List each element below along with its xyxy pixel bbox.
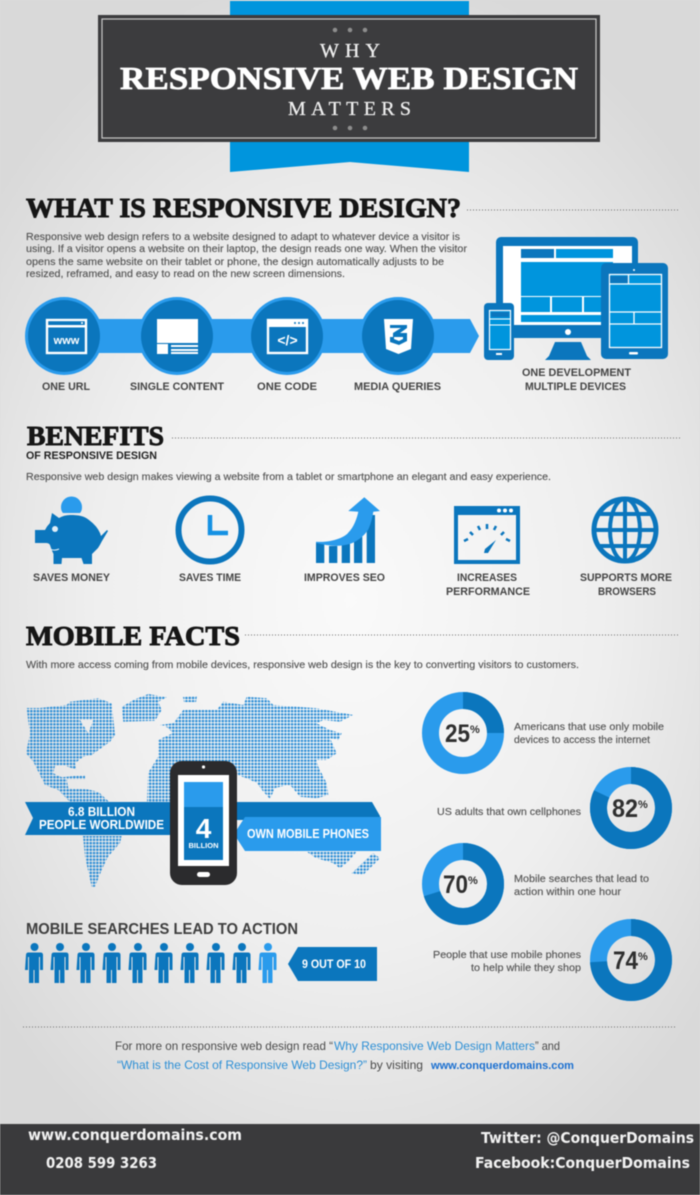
subheading: mobile searches: MOBILE SEARCHES LEAD TO ACTION bbox=[26, 921, 298, 938]
mobile facts intro: With more access coming from mobile devices, responsive web design is the key to converting visitors to customers. bbox=[26, 659, 579, 671]
right ribbon: own mobile phones: OWN MOBILE PHONES bbox=[247, 827, 369, 841]
title plate bbox=[98, 15, 600, 142]
closing call to action: by visiting bbox=[370, 1058, 423, 1072]
title line 3: MATTERS bbox=[288, 98, 411, 120]
icon: clock bbox=[178, 498, 242, 562]
text: 25 percent: devices to access the internet bbox=[514, 734, 650, 746]
devices label bbox=[522, 367, 631, 393]
donut: 74 percent bbox=[598, 928, 664, 992]
left ribbon: population: PEOPLE WORLDWIDE bbox=[39, 818, 164, 832]
text: 82 percent: US adults that own cellphones bbox=[437, 806, 581, 818]
phone graphic: BILLION bbox=[188, 841, 218, 850]
donut: 25 percent: % bbox=[470, 724, 480, 736]
blue ribbon bbox=[230, 1, 469, 172]
footer phone: 0208 599 3263 bbox=[46, 1154, 157, 1172]
closing call to action: “What is the Cost of Responsive Web Design?” bbox=[117, 1058, 367, 1072]
donut: 82 percent: 82 bbox=[612, 795, 638, 823]
text: 25 percent: Americans that use only mobile bbox=[514, 721, 664, 733]
text: 70 percent: action within one hour bbox=[514, 886, 622, 898]
icon: one url: www bbox=[53, 335, 80, 347]
donut: 70 percent: 70 bbox=[443, 871, 468, 899]
feature labels: MEDIA QUERIES bbox=[354, 381, 441, 393]
heading: mobile facts: MOBILE FACTS bbox=[26, 621, 240, 651]
benefit labels: INCREASES bbox=[457, 572, 517, 584]
tag: 9 out of 10: 9 OUT OF 10 bbox=[302, 959, 366, 971]
closing call to action: www.conquerdomains.com bbox=[430, 1060, 574, 1072]
closing call to action bbox=[115, 1039, 574, 1072]
tablet bbox=[601, 263, 668, 359]
feature labels: SINGLE CONTENT bbox=[130, 381, 224, 393]
footer website: www.conquerdomains.com bbox=[28, 1126, 242, 1144]
icon: media queries css3 shield bbox=[359, 297, 437, 375]
intro paragraph: Responsive web design refers to a website designed to adapt to whatever device a visitor is bbox=[26, 231, 460, 243]
devices label: MULTIPLE DEVICES bbox=[525, 381, 626, 393]
bottom ornament dots bbox=[333, 126, 367, 130]
text: 74 percent bbox=[433, 949, 581, 974]
top ornament dots bbox=[333, 28, 367, 32]
closing call to action: Why Responsive Web Design Matters bbox=[334, 1039, 535, 1053]
donut: 82 percent: % bbox=[638, 799, 648, 811]
phone graphic: 4 bbox=[196, 813, 212, 844]
icon: globe bbox=[594, 499, 656, 561]
footer bar bbox=[0, 1124, 700, 1195]
intro paragraph bbox=[26, 231, 468, 280]
heading: what is responsive design: WHAT IS RESPONSIVE DESIGN? bbox=[26, 193, 461, 223]
title line 2: RESPONSIVE WEB DESIGN bbox=[120, 60, 578, 96]
benefit labels: SAVES TIME bbox=[179, 572, 241, 584]
text: 74 percent: People that use mobile phones bbox=[433, 949, 581, 961]
icon: multiple devices bbox=[484, 237, 668, 360]
desktop monitor bbox=[496, 237, 638, 360]
intro paragraph: using. If a visitor opens a website on their laptop, the design reads one way. When the visitor bbox=[26, 243, 468, 255]
benefit labels: SUPPORTS MORE bbox=[580, 572, 672, 584]
dotted world map bbox=[26, 694, 380, 887]
donut: 74 percent: % bbox=[638, 951, 648, 963]
phone bbox=[484, 303, 514, 360]
donut: 70 percent bbox=[430, 852, 496, 916]
text: 74 percent: to help while they shop bbox=[471, 962, 581, 974]
left ribbon: population: 6.8 BILLION bbox=[68, 805, 135, 819]
phone graphic bbox=[170, 761, 237, 885]
benefit labels: PERFORMANCE bbox=[446, 586, 530, 598]
closing call to action: For more on responsive web design read “ bbox=[115, 1039, 333, 1053]
feature labels: ONE CODE bbox=[257, 381, 317, 393]
closing call to action: ” and bbox=[535, 1039, 560, 1053]
icon: one url bbox=[25, 297, 103, 375]
header banner bbox=[98, 1, 600, 172]
donut: 25 percent bbox=[430, 700, 496, 766]
benefit labels: SAVES MONEY bbox=[33, 572, 111, 584]
pictogram: 9 out of 10 people bbox=[25, 943, 276, 983]
donut: 82 percent bbox=[598, 776, 664, 840]
donut: 74 percent: 74 bbox=[613, 947, 638, 975]
text: 70 percent: Mobile searches that lead to bbox=[514, 873, 649, 885]
icon: piggy bank bbox=[35, 497, 108, 564]
text: 70 percent bbox=[514, 873, 649, 898]
benefit labels: BROWSERS bbox=[598, 586, 656, 598]
devices label: ONE DEVELOPMENT bbox=[522, 367, 631, 379]
icon: performance gauge window bbox=[454, 506, 520, 562]
feature band bbox=[25, 297, 479, 375]
icon: single content bbox=[138, 297, 216, 375]
intro paragraph: resized, reframed, and easy to read on the new screen dimensions. bbox=[26, 268, 345, 280]
intro paragraph: opens the same website on their tablet or phone, the design automatically adjusts to be bbox=[26, 256, 444, 268]
donut: 25 percent: 25 bbox=[445, 720, 470, 748]
arrow band bbox=[40, 319, 479, 353]
right ribbon: own mobile phones bbox=[234, 802, 381, 851]
left ribbon: population bbox=[25, 802, 172, 835]
benefits intro text: Responsive web design makes viewing a website from a tablet or smartphone an elegant and easy experience. bbox=[26, 471, 551, 483]
benefit labels: IMPROVES SEO bbox=[304, 572, 385, 584]
text: 25 percent bbox=[514, 721, 664, 746]
icon: rising bars with arrow bbox=[316, 497, 380, 563]
icon: one code bbox=[248, 297, 326, 375]
title line 1: WHY bbox=[320, 40, 380, 62]
icon: one code: </> bbox=[277, 332, 298, 348]
tag: 9 out of 10 bbox=[288, 947, 377, 981]
heading: benefits: BENEFITS bbox=[27, 421, 164, 451]
feature labels: ONE URL bbox=[42, 381, 90, 393]
feature labels bbox=[42, 381, 441, 393]
donut: 70 percent: % bbox=[468, 875, 478, 887]
benefit labels bbox=[33, 572, 672, 598]
heading: benefits: OF RESPONSIVE DESIGN bbox=[26, 450, 157, 462]
